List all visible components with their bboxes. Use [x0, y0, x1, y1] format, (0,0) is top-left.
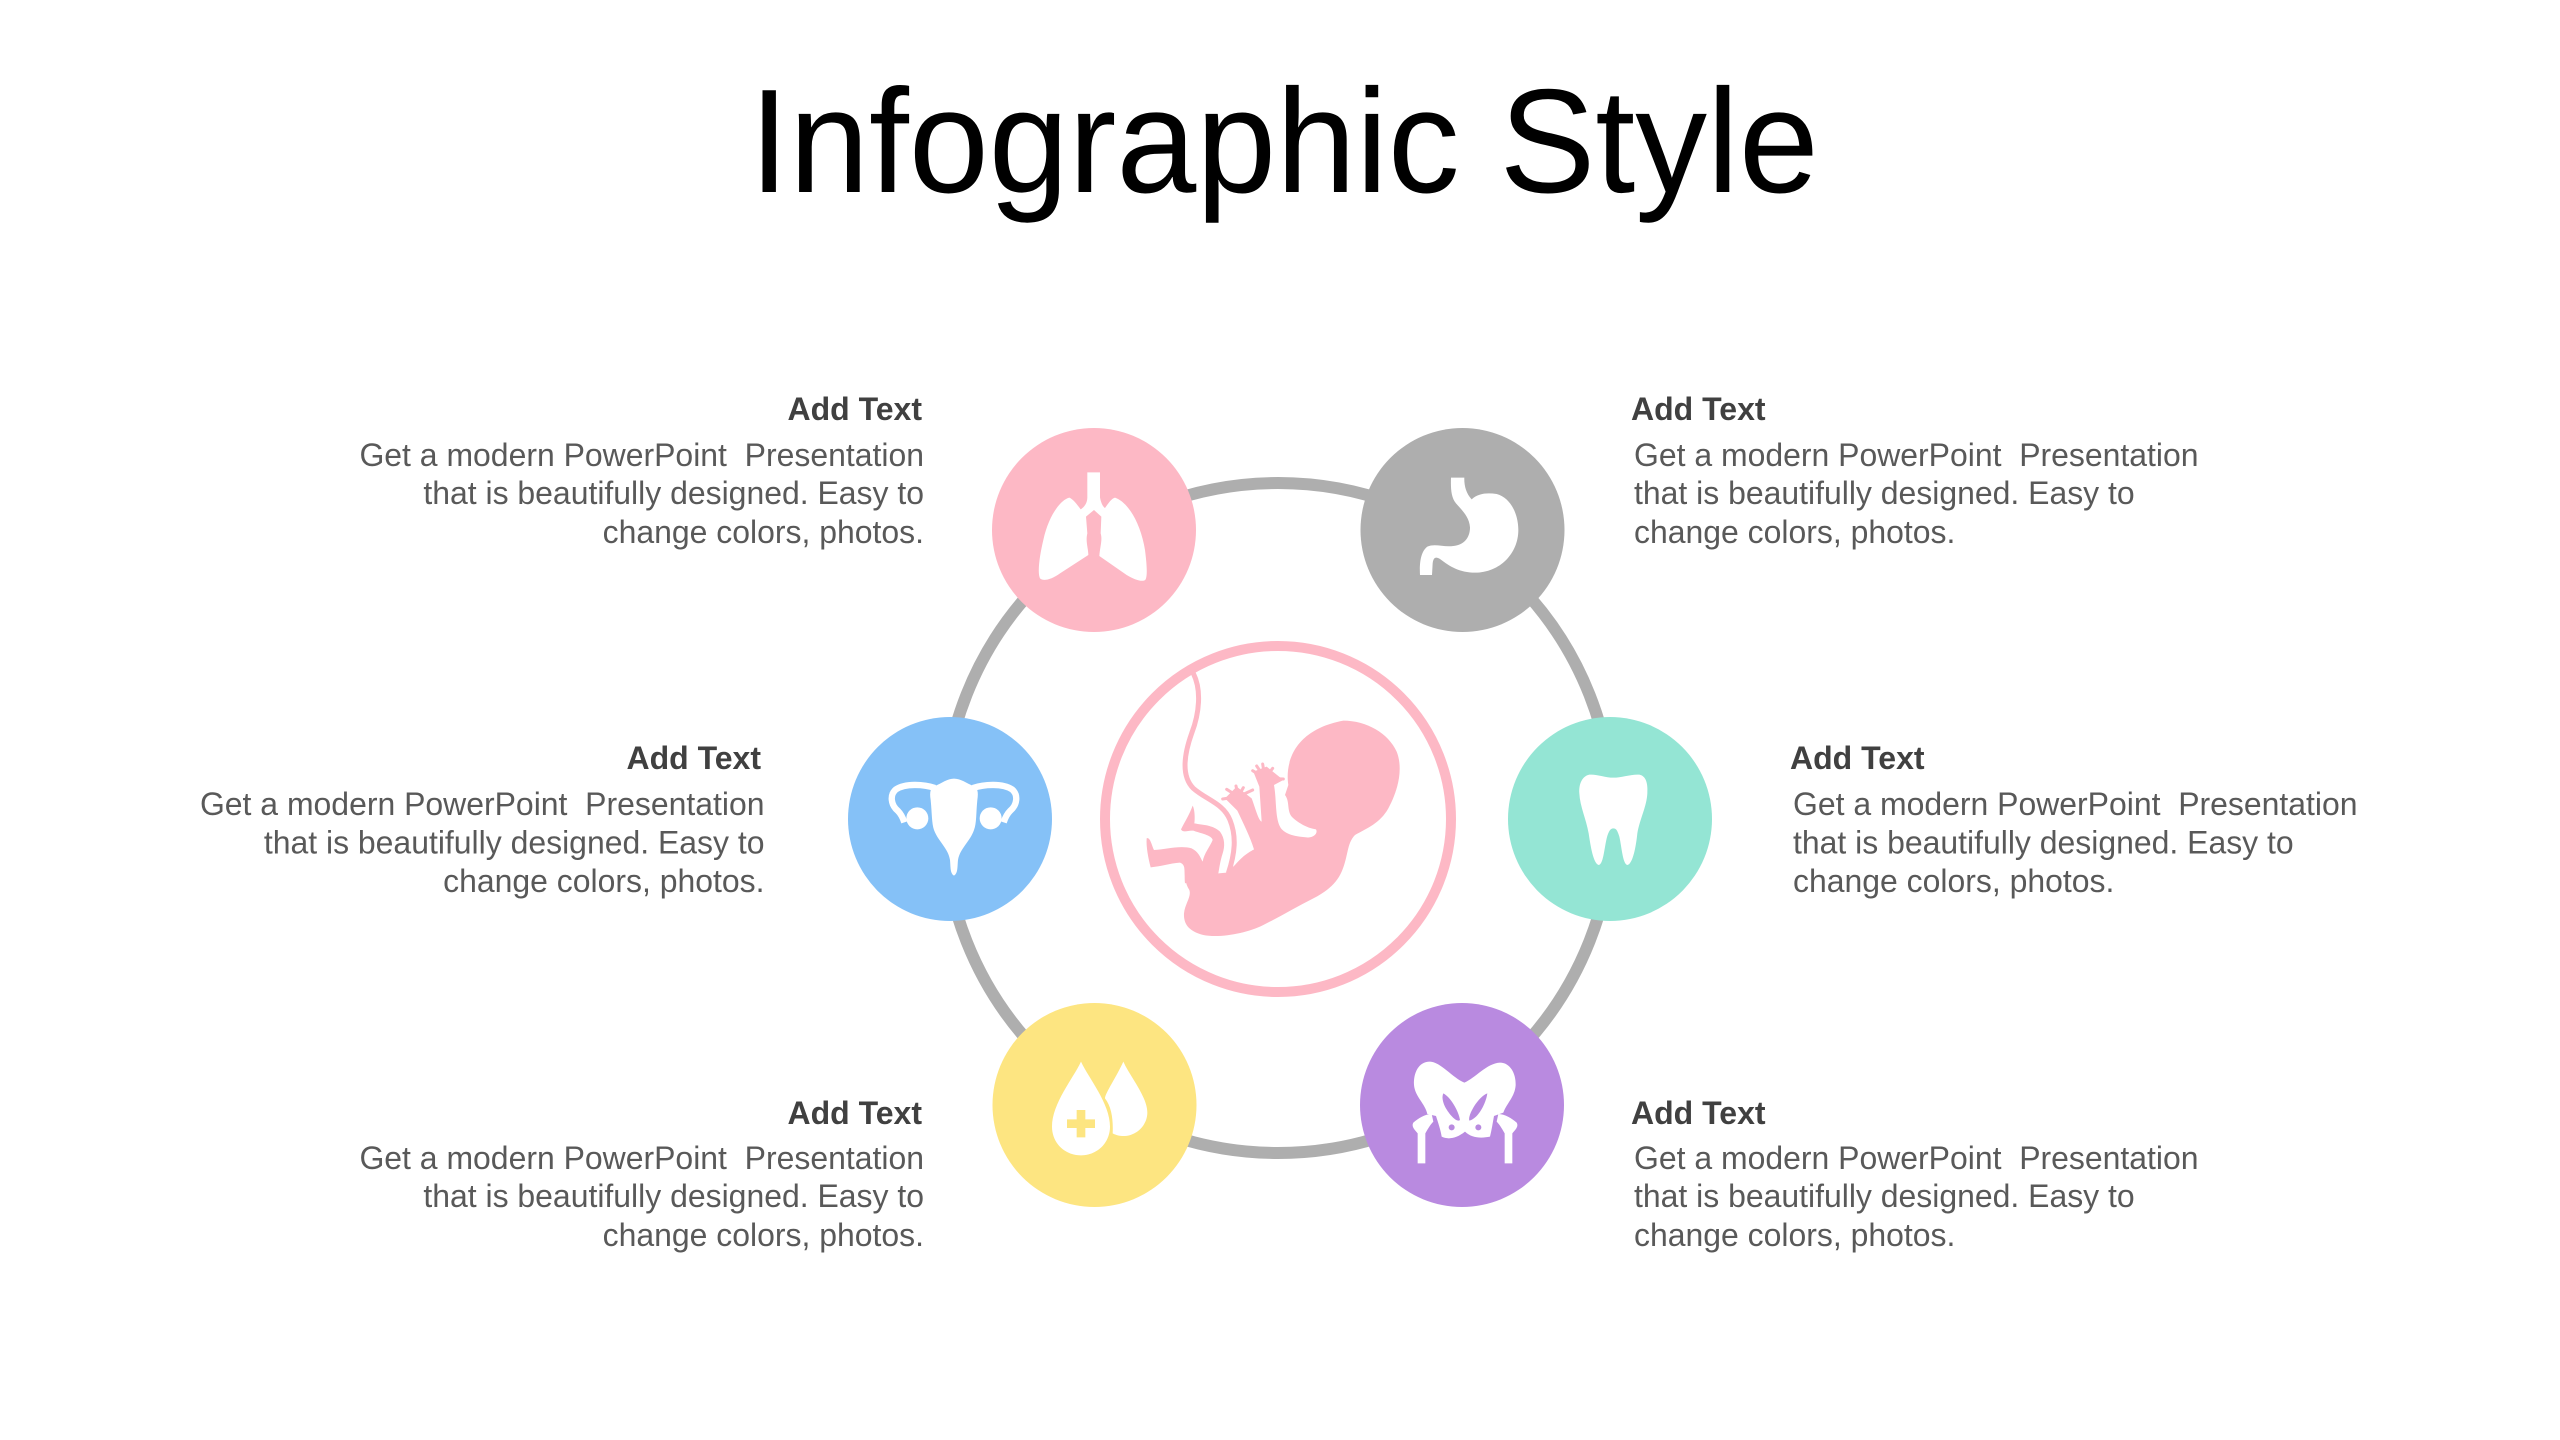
text block: bottom left — [359, 1095, 924, 1253]
panel: blood drops circle — [992, 1003, 1196, 1207]
text block: top right: Get a modern PowerPoint Presentation — [1634, 437, 2199, 473]
text block: middle right: Get a modern PowerPoint Presentation — [1793, 786, 2358, 822]
text block: bottom right: Get a modern PowerPoint Presentation — [1634, 1140, 2199, 1176]
text block: bottom right — [1631, 1095, 2199, 1253]
icon: uterus — [892, 779, 1016, 876]
icon: blood drops — [1052, 1062, 1147, 1155]
title: Infographic Style — [749, 58, 1819, 223]
icon: stomach — [1420, 478, 1518, 575]
panel: stomach circle — [1360, 428, 1564, 632]
text block: middle right: Add Text — [1790, 740, 1925, 776]
text block: middle left — [200, 740, 764, 899]
panel: uterus circle — [848, 717, 1052, 921]
text block: top right: that is beautifully designed. Easy to — [1634, 475, 2135, 511]
text block: top right: Add Text — [1631, 391, 1766, 427]
panel: pelvis circle — [1360, 1003, 1564, 1207]
text block: bottom left: Add Text — [787, 1095, 922, 1131]
text block: bottom left: change colors, photos. — [603, 1217, 924, 1253]
centre ring — [1105, 646, 1451, 992]
text block: bottom right: that is beautifully designed. Easy to — [1634, 1178, 2135, 1214]
text block: middle right: that is beautifully designed. Easy to — [1793, 824, 2294, 860]
text block: top right — [1631, 391, 2199, 550]
text block: middle left: change colors, photos. — [443, 863, 764, 899]
text block: middle right — [1790, 740, 2358, 899]
text block: middle left: Get a modern PowerPoint Presentation — [200, 786, 764, 822]
text block: top left: Add Text — [787, 391, 922, 427]
icon: pelvis — [1413, 1062, 1517, 1163]
text block: top left: change colors, photos. — [603, 514, 924, 550]
text block: middle left: Add Text — [626, 740, 761, 776]
icon: tooth — [1579, 775, 1647, 865]
text block: top left: that is beautifully designed. Easy to — [423, 475, 924, 511]
icon: fetus — [1147, 673, 1400, 936]
text block: top right: change colors, photos. — [1634, 514, 1955, 550]
text block: bottom left: that is beautifully designed. Easy to — [423, 1178, 924, 1214]
panel: lungs circle — [992, 428, 1196, 632]
text block: top left — [359, 391, 924, 550]
icon: lungs — [1039, 472, 1147, 581]
text block: bottom right: change colors, photos. — [1634, 1217, 1955, 1253]
text block: middle left: that is beautifully designed. Easy to — [264, 824, 764, 860]
text block: top left: Get a modern PowerPoint Presentation — [359, 437, 924, 473]
text block: bottom left: Get a modern PowerPoint Presentation — [359, 1140, 924, 1176]
text block: bottom right: Add Text — [1631, 1095, 1766, 1131]
ring connecting circles — [943, 483, 1613, 1153]
panel: tooth circle — [1508, 717, 1712, 921]
panel: centre fetus icon — [1105, 646, 1451, 992]
text block: middle right: change colors, photos. — [1793, 863, 2114, 899]
